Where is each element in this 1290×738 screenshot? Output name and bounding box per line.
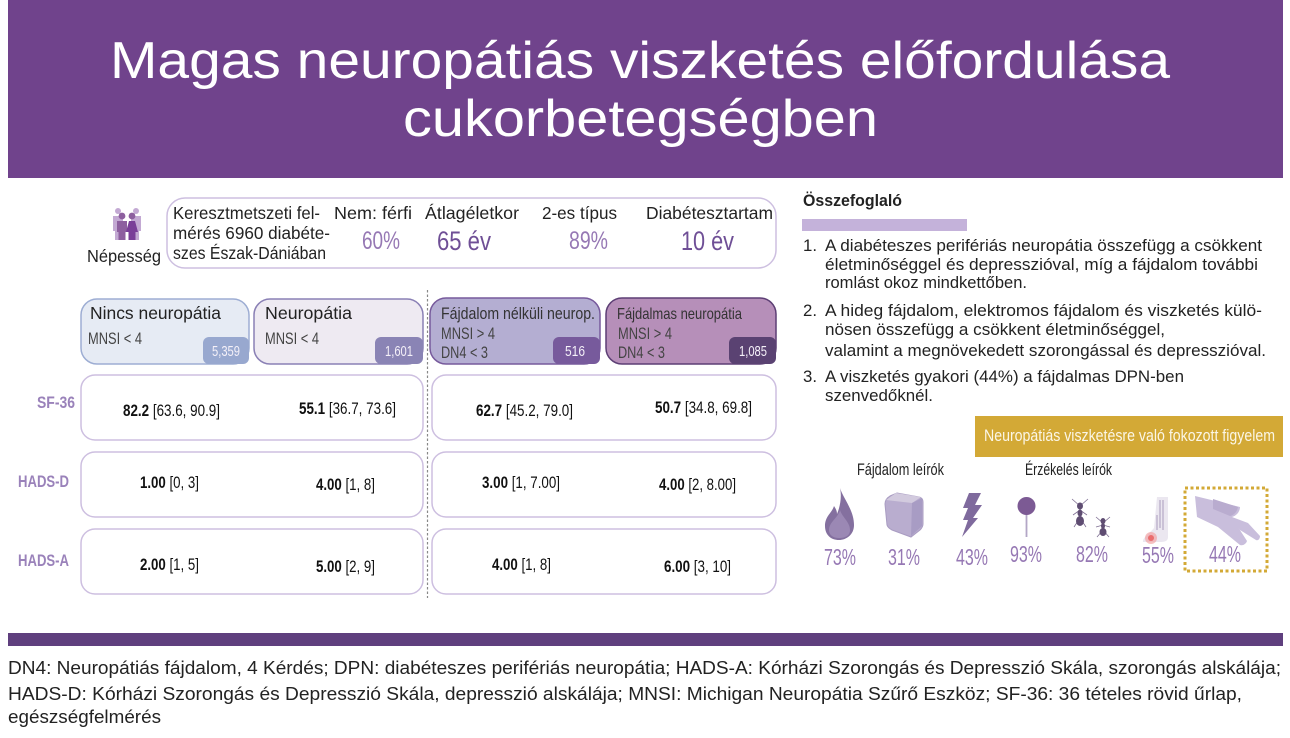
icon: itching hand 44% in dotted highlight box: 44% (1209, 541, 1241, 567)
study description (173, 203, 330, 263)
group card: painless neuropathy (430, 298, 600, 364)
row: HADS-A right panel: 6.00 [3, 10] (664, 558, 731, 576)
group card: neuropathy: Neuropátia (265, 303, 352, 323)
group card: painless neuropathy: DN4 < 3 (441, 344, 488, 362)
summary item 3: A viszketés gyakori (44%) a fájdalmas DPN-ben (825, 367, 1184, 386)
icon: foot with pain spot 55% (1142, 497, 1174, 568)
stat: type 2: 89% (569, 227, 608, 255)
stat: mean age: 65 év (437, 226, 491, 256)
stat: type 2 (542, 203, 617, 255)
summary item 3: szenvedőknél. (825, 386, 933, 405)
icon: pin 93%: 93% (1010, 541, 1042, 567)
row: HADS-A right panel: 4.00 [1, 8] (492, 556, 551, 574)
stat: diabetes duration (646, 203, 773, 256)
row: HADS-D left panel (81, 452, 423, 517)
heading: sensation descriptors: Érzékelés leírók (1025, 460, 1113, 479)
row: SF-36 right panel (432, 375, 776, 440)
header banner with title: cukorbetegségben (403, 90, 878, 148)
icon: lightning bolt 43%: 43% (956, 544, 988, 570)
summary item 2: 2. (803, 301, 817, 320)
icon: ice cube 31%: 31% (888, 544, 920, 570)
group card: no neuropathy: MNSI < 4 (88, 330, 142, 348)
heading: summary (802, 191, 967, 231)
footnote abbreviations (8, 657, 1281, 727)
row: SF-36 left panel: 55.1 [36.7, 73.6] (299, 400, 396, 418)
stat: diabetes duration: 10 év (681, 226, 734, 256)
group card: painful neuropathy: MNSI > 4 (618, 325, 672, 343)
stat: diabetes duration: Diabétesztartam (646, 203, 773, 223)
icon: pin 93% (1010, 497, 1042, 567)
footnote abbreviations: HADS-D: Kórházi Szorongás és Depresszió Skála, depresszió alskálája; MNSI: Michigan Neuropátia Szűrő Eszköz; SF-36: 36 tételes rövid űrlap, (8, 683, 1242, 704)
panel: population summary (167, 198, 776, 268)
stat: mean age: Átlagéletkor (425, 203, 519, 223)
heading: pain descriptors: Fájdalom leírók (857, 461, 945, 479)
icon: ants 82%: 82% (1076, 541, 1108, 567)
summary item 3: 3. (803, 367, 817, 386)
stat: sex (334, 203, 412, 255)
row: SF-36 left panel (81, 375, 423, 440)
footer bar (8, 633, 1283, 646)
row label: SF-36: SF-36 (37, 393, 75, 412)
group card: neuropathy: MNSI < 4 (265, 330, 319, 348)
row: HADS-A left panel (81, 529, 423, 594)
header banner with title: Magas neuropátiás viszketés előfordulása (110, 32, 1170, 90)
row: HADS-D right panel: 4.00 [2, 8.00] (659, 476, 736, 494)
group card: no neuropathy: 5,359 (212, 344, 240, 360)
summary item 2: A hideg fájdalom, elektromos fájdalom és viszketés külö- (825, 301, 1262, 320)
icon: lightning bolt 43% (956, 493, 988, 570)
study description: szes Észak-Dániában (173, 243, 326, 263)
group card: no neuropathy: Nincs neuropátia (90, 303, 221, 323)
header banner with title (8, 0, 1283, 178)
row label: HADS-D: HADS-D (18, 472, 69, 491)
summary item 2: valamint a megnövekedett szorongással és depresszióval. (825, 341, 1266, 360)
summary item 1 (803, 236, 1262, 292)
summary item 2 (803, 301, 1266, 360)
group card: neuropathy: 1,601 (385, 344, 413, 360)
callout: neuropathic itch attention (975, 416, 1283, 457)
footnote abbreviations: egészségfelmérés (8, 706, 161, 727)
group card: no neuropathy (81, 299, 249, 364)
row: SF-36 right panel: 62.7 [45.2, 79.0] (476, 402, 573, 420)
population icon and label (87, 208, 161, 266)
stat: mean age (425, 203, 519, 256)
summary item 1: életminőséggel és depresszióval, míg a fájdalom további (825, 255, 1258, 274)
row: HADS-D right panel: 3.00 [1, 7.00] (482, 474, 560, 492)
stat: sex: 60% (362, 227, 400, 255)
group card: painful neuropathy: Fájdalmas neuropátia (617, 306, 742, 323)
stat: sex: Nem: férfi (334, 203, 412, 223)
row: HADS-A right panel (432, 529, 776, 594)
icon: flame 73%: 73% (824, 544, 856, 570)
row: HADS-D left panel: 1.00 [0, 3] (140, 474, 199, 492)
icon: itching hand 44% in dotted highlight box (1185, 488, 1267, 571)
row: SF-36 right panel: 50.7 [34.8, 69.8] (655, 399, 752, 417)
summary item 1: 1. (803, 236, 817, 255)
study description: mérés 6960 diabéte- (173, 223, 330, 243)
row: SF-36 left panel: 82.2 [63.6, 90.9] (123, 402, 220, 420)
summary item 1: romlást okoz mindkettőben. (825, 273, 1027, 292)
row: HADS-A left panel: 5.00 [2, 9] (316, 558, 375, 576)
row: HADS-D right panel (432, 452, 776, 517)
row: HADS-D left panel: 4.00 [1, 8] (316, 476, 375, 494)
footnote abbreviations: DN4: Neuropátiás fájdalom, 4 Kérdés; DPN: diabéteszes perifériás neuropátia; HADS-A: Kórházi Szorongás és Depresszió Skála, szorongás alskálája; (8, 657, 1281, 678)
row label: HADS-A: HADS-A (18, 551, 69, 570)
group card: painless neuropathy: Fájdalom nélküli neurop. (441, 305, 595, 323)
stat: type 2: 2-es típus (542, 203, 617, 223)
summary item 1: A diabéteszes perifériás neuropátia összefügg a csökkent (825, 236, 1262, 255)
group card: neuropathy (254, 299, 423, 364)
group card: painful neuropathy: DN4 < 3 (618, 344, 665, 362)
icon: ice cube 31% (885, 493, 923, 570)
group card: painful neuropathy: 1,085 (739, 344, 767, 360)
summary list (803, 236, 1266, 405)
icon: ants 82% (1072, 499, 1110, 567)
row: HADS-A left panel: 2.00 [1, 5] (140, 556, 199, 574)
study description: Keresztmetszeti fel- (173, 203, 320, 223)
population icon and label: Népesség (87, 246, 161, 266)
heading: summary: Összefoglaló (803, 191, 902, 210)
group card: painless neuropathy: MNSI > 4 (441, 325, 495, 343)
group card: painful neuropathy (606, 298, 776, 364)
icon: flame 73% (824, 488, 856, 570)
summary item 3 (803, 367, 1184, 405)
summary item 2: nösen összefügg a csökkent életminőséggel, (825, 320, 1165, 339)
icon: foot with pain spot 55%: 55% (1142, 542, 1174, 568)
group card: painless neuropathy: 516 (565, 344, 585, 360)
